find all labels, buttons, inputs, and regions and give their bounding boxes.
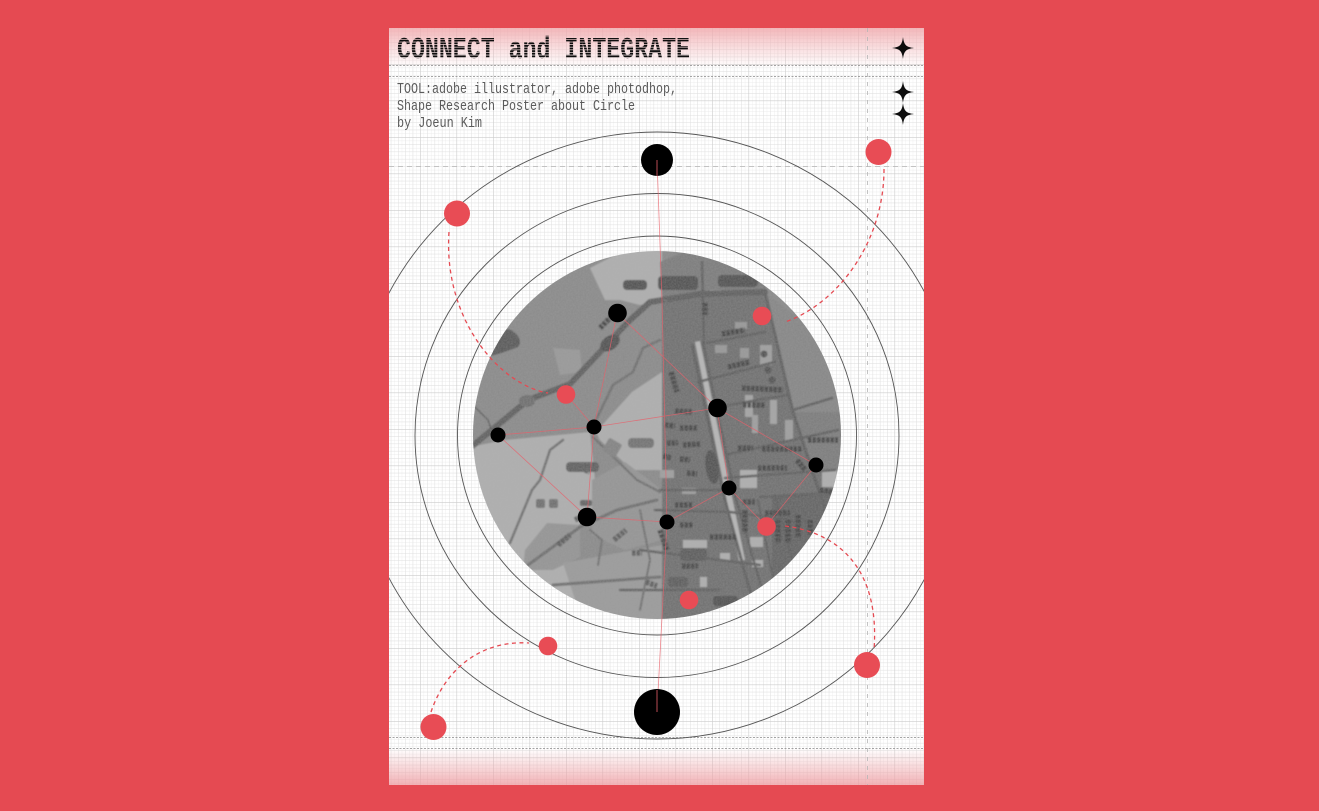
description text: Shape Research Poster about Circle <box>397 98 635 114</box>
map circle <box>473 251 841 619</box>
top pink gradient band <box>389 28 924 68</box>
concentric orbit rings <box>389 132 924 740</box>
map texture <box>473 251 841 619</box>
dashed red connector arcs <box>431 169 884 712</box>
map base tone <box>473 251 804 562</box>
dashed guide lines <box>389 28 924 785</box>
rows of dotted buildings <box>558 303 838 586</box>
red nodes <box>420 139 892 740</box>
dense city <box>662 286 838 619</box>
title: CONNECT and INTEGRATE <box>397 34 690 68</box>
thin red lines over top and bottom nodes <box>656 160 658 712</box>
major roads <box>465 262 838 610</box>
infographic poster <box>389 28 924 785</box>
description text: TOOL:adobe illustrator, adobe photodhop, <box>397 81 677 97</box>
black nodes <box>490 144 824 735</box>
solid buildings <box>519 275 776 606</box>
thin red connection lines <box>498 160 816 712</box>
description text <box>397 81 677 131</box>
icon: sparkle stars <box>892 37 914 125</box>
water blob <box>490 329 520 356</box>
description text: by Joeun Kim <box>397 115 482 131</box>
light building patches <box>660 290 837 587</box>
light districts <box>474 251 663 600</box>
mottled grey districts <box>523 348 662 630</box>
bottom pink gradient band <box>389 748 924 785</box>
poster sheet with grid <box>389 28 924 785</box>
